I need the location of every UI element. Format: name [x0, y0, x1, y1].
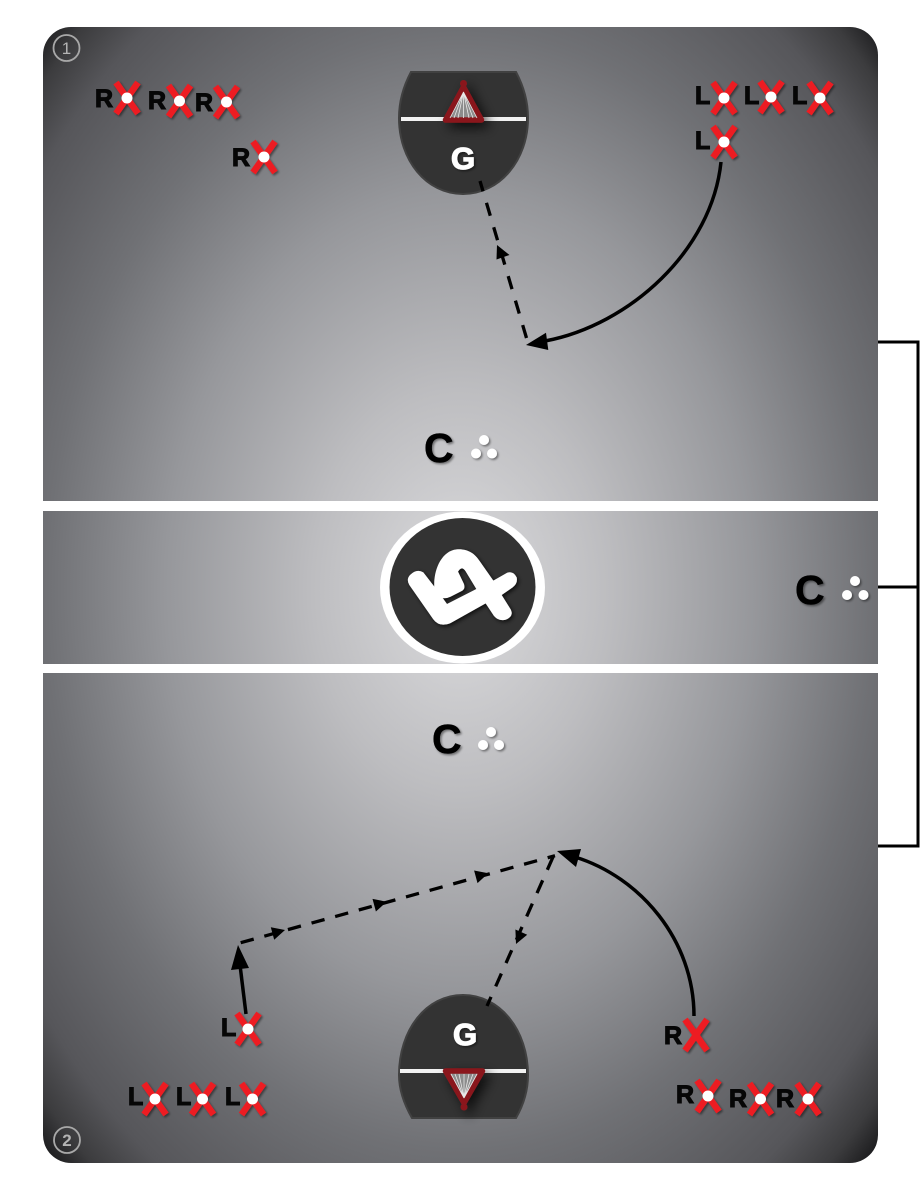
bottom-left player L: L — [225, 1083, 240, 1111]
upper white line — [43, 501, 878, 511]
pass path to goal — [487, 857, 553, 1006]
goalie label: G — [453, 1017, 477, 1052]
cut group marker: lower: C — [432, 716, 462, 762]
bottom-right player R — [776, 1084, 819, 1114]
top-left player R — [148, 86, 190, 116]
goal cage — [446, 1071, 482, 1110]
pass path along the top — [241, 856, 555, 943]
center logo — [380, 512, 545, 664]
top-right player L: L — [744, 82, 759, 110]
bottom-left player L — [221, 1014, 259, 1044]
goal line — [401, 117, 526, 121]
cut group marker: right: C — [795, 567, 825, 613]
step number 2 — [54, 1127, 80, 1153]
cut group marker: upper: C — [424, 425, 454, 471]
top-right player L — [792, 82, 831, 114]
bracket: cut group connector — [878, 342, 918, 846]
bottom-left player L: L — [221, 1014, 236, 1042]
bottom-left player L — [128, 1083, 166, 1114]
logo mark — [408, 549, 517, 625]
pass arrowhead 4 — [515, 930, 527, 944]
cut arrowhead right — [557, 849, 581, 867]
goal cage — [446, 80, 482, 120]
cut group marker: upper — [424, 425, 497, 471]
bottom-right player R — [729, 1084, 772, 1114]
step number 1 — [54, 35, 80, 61]
bottom-right player R: R — [664, 1022, 682, 1050]
cut arrowhead left — [231, 945, 249, 970]
pass arrowhead — [496, 245, 510, 260]
top-right player L — [695, 82, 735, 114]
top goal crease — [399, 72, 528, 194]
top-left player R: R — [232, 144, 250, 172]
top-left player R: R — [195, 89, 213, 117]
top-right player L: L — [695, 82, 710, 110]
bottom-left player L — [225, 1083, 264, 1114]
top-right player L: L — [792, 82, 807, 110]
bottom-left player L: L — [128, 1083, 143, 1111]
top-right player L — [744, 82, 782, 112]
top-right player L: L — [695, 127, 710, 155]
cut arrowhead — [526, 333, 548, 350]
step number 2: 2 — [62, 1131, 72, 1150]
pass arrowhead 1 — [271, 927, 285, 940]
top-left player R — [195, 86, 238, 118]
bottom-left player L: L — [176, 1083, 191, 1111]
top-right player L — [695, 126, 735, 158]
bottom-right player R — [664, 1020, 707, 1050]
bottom goal crease — [399, 995, 528, 1118]
cut group marker: lower — [432, 716, 504, 762]
bottom-right player R: R — [676, 1081, 694, 1109]
goalie label: G — [451, 141, 475, 176]
lower white line — [43, 664, 878, 673]
top-left player R — [232, 142, 275, 172]
bottom-left player L — [176, 1083, 214, 1114]
play arrows: bottom — [231, 849, 694, 1016]
cut path right — [575, 857, 694, 1016]
cut path — [545, 162, 721, 341]
pass arrowhead 2 — [372, 899, 387, 912]
bottom-right player R: R — [776, 1085, 794, 1113]
top-left player R — [95, 82, 138, 114]
top-left player R: R — [148, 87, 166, 115]
top-left player R: R — [95, 85, 113, 113]
bottom-right player R — [676, 1080, 719, 1112]
pass arrowhead 3 — [474, 870, 488, 883]
goal line — [400, 1069, 526, 1073]
bottom-right player R: R — [729, 1085, 747, 1113]
pass path to shooter — [480, 181, 526, 338]
cut group marker: right — [795, 567, 868, 613]
play arrows: top — [480, 162, 721, 350]
step number 1: 1 — [62, 39, 71, 58]
cut path left — [240, 965, 246, 1014]
